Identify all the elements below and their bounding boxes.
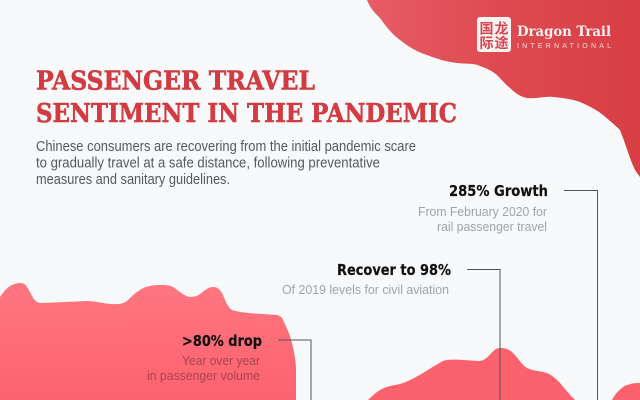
callout: 285% growth: rail passenger travel	[437, 219, 547, 234]
callout: recover to 98%: Recover to 98%	[337, 261, 451, 279]
callout: 285% growth: From February 2020 for	[418, 204, 548, 219]
bottom right pink mountain	[612, 383, 640, 400]
logo seal	[477, 17, 511, 53]
bottom left pink mountain	[0, 283, 296, 400]
intro paragraph: measures and sanitary guidelines.	[36, 172, 230, 188]
top right red wave	[367, 0, 640, 177]
callout: recover to 98%	[282, 261, 451, 297]
callout: 285% growth	[418, 182, 548, 234]
title	[36, 66, 457, 129]
logo subtitle: INTERNATIONAL	[517, 43, 611, 50]
logo seal: 龙	[494, 18, 508, 38]
bottom middle pink mountain	[368, 348, 575, 400]
title: SENTIMENT IN THE PANDEMIC	[36, 99, 457, 129]
logo	[477, 17, 611, 53]
callout: 285% growth: 285% Growth	[449, 182, 548, 200]
callout: over 80% drop: Year over year	[182, 353, 261, 368]
logo seal: 国	[480, 18, 494, 38]
title: PASSENGER TRAVEL	[36, 66, 315, 96]
logo name: Dragon Trail	[517, 24, 611, 40]
intro paragraph	[36, 139, 416, 188]
callout: over 80% drop	[147, 332, 262, 383]
callout: over 80% drop: in passenger volume	[147, 368, 260, 383]
logo seal: 途	[494, 33, 508, 53]
intro paragraph: to gradually travel at a safe distance, following preventative	[36, 156, 380, 172]
callout: recover to 98%: Of 2019 levels for civil aviation	[282, 282, 449, 297]
leader line: recover to 98%	[467, 270, 500, 400]
callout: over 80% drop: >80% drop	[182, 332, 262, 350]
leader line: 285% growth	[564, 190, 598, 400]
leader line: over 80% drop	[278, 340, 311, 400]
intro paragraph: Chinese consumers are recovering from the initial pandemic scare	[36, 139, 416, 155]
logo seal: 际	[480, 33, 494, 53]
